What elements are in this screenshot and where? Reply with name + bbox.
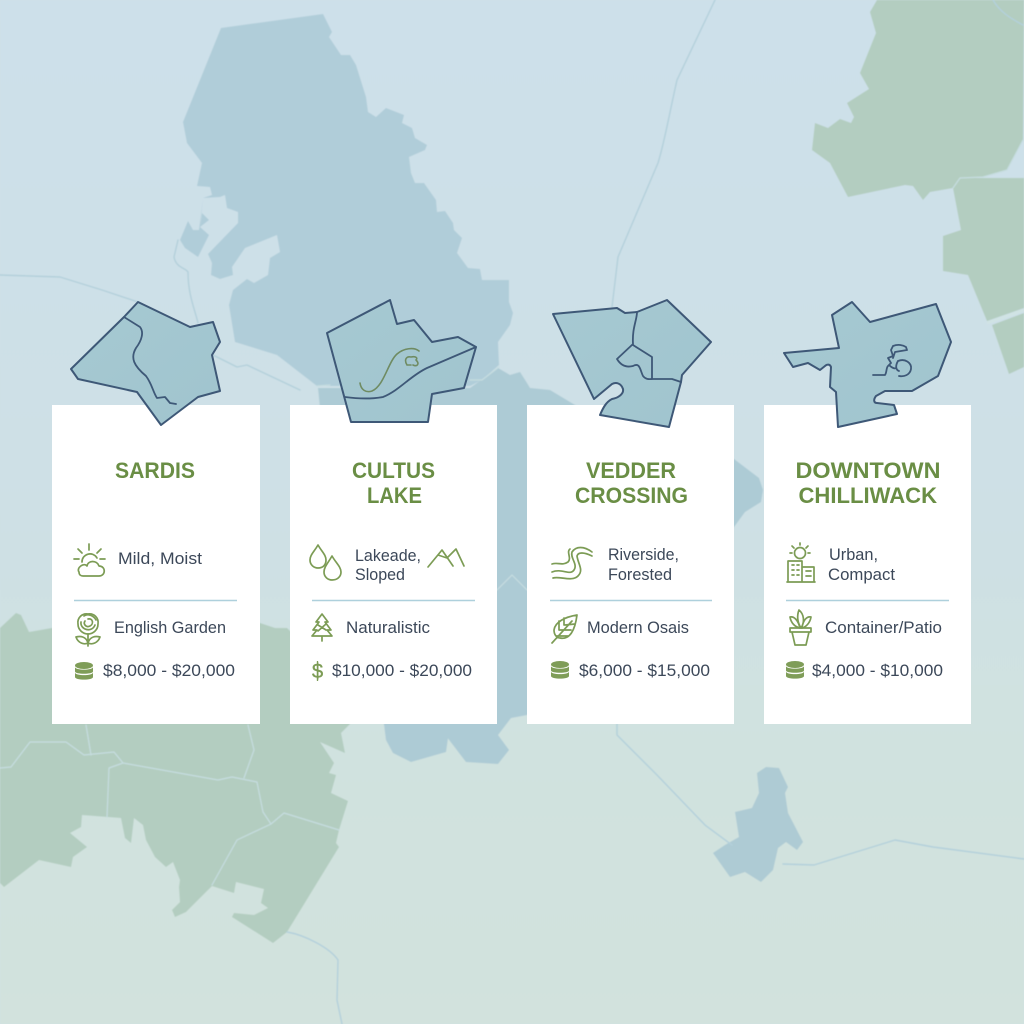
green land east	[943, 178, 1024, 321]
area map: Cultus Lake	[327, 300, 476, 422]
icon: potted plant	[790, 610, 811, 645]
text: climate: Mild, Moist	[118, 550, 202, 568]
title: CULTUS	[352, 458, 435, 483]
card panel	[527, 405, 734, 724]
divider	[786, 600, 949, 602]
text: climate	[608, 546, 679, 584]
icon: coins	[551, 661, 569, 679]
area map: Downtown Chilliwack	[784, 302, 951, 427]
blue water south of lake	[318, 368, 763, 764]
icon: sun and cloud	[74, 544, 105, 576]
title	[575, 458, 688, 508]
small southern lake	[713, 767, 803, 882]
icon: dollar sign: $	[312, 661, 323, 683]
title	[352, 458, 435, 508]
text: garden style: English Garden	[114, 619, 226, 637]
text: climate: Forested	[608, 566, 672, 584]
green land southwest	[0, 613, 350, 943]
title	[796, 458, 940, 508]
title: CHILLIWACK	[798, 483, 937, 508]
text: budget: $6,000 - $15,000	[579, 662, 710, 680]
text: garden style: Modern Osais	[587, 619, 689, 637]
text: garden style: Container/Patio	[825, 619, 942, 637]
icon: pine tree	[312, 614, 332, 641]
title: SARDIS	[115, 458, 195, 483]
card panel	[764, 405, 971, 724]
icon: coins	[786, 661, 804, 679]
text: climate: Urban,	[829, 546, 878, 564]
text: climate: Compact	[828, 566, 895, 584]
icon: mountains	[428, 549, 464, 567]
card panel	[52, 405, 260, 724]
divider	[74, 600, 237, 602]
area map: Sardis	[71, 302, 220, 425]
icon: rose	[76, 614, 100, 646]
title: LAKE	[367, 483, 422, 508]
card: Downtown Chilliwack	[764, 302, 971, 724]
title: VEDDER	[586, 458, 676, 483]
divider	[312, 600, 475, 602]
divider	[550, 600, 712, 602]
card: Cultus Lake	[290, 300, 497, 724]
title: CROSSING	[575, 483, 688, 508]
icon: sun over city	[787, 543, 815, 582]
text: climate: Lakeade,	[355, 547, 421, 565]
icon: river waves	[552, 548, 592, 579]
area map: Vedder Crossing	[553, 300, 711, 427]
title: DOWNTOWN	[796, 458, 940, 483]
green land top right	[812, 0, 1024, 200]
card: Sardis	[52, 302, 260, 724]
text: climate	[355, 547, 421, 584]
text: climate: Riverside,	[608, 546, 679, 564]
icon: coins	[75, 662, 93, 680]
text: climate	[828, 546, 895, 584]
text: budget: $10,000 - $20,000	[332, 662, 472, 680]
text: garden style: Naturalistic	[346, 619, 430, 637]
green land far east	[992, 313, 1024, 374]
icon: leaf	[552, 615, 577, 643]
large blue lake	[180, 14, 513, 386]
card panel	[290, 405, 497, 724]
card: Vedder Crossing	[527, 300, 734, 724]
icon: water drops	[310, 545, 341, 580]
text: climate: Sloped	[355, 566, 405, 584]
text: budget: $4,000 - $10,000	[812, 662, 943, 680]
text: budget: $8,000 - $20,000	[103, 662, 235, 680]
